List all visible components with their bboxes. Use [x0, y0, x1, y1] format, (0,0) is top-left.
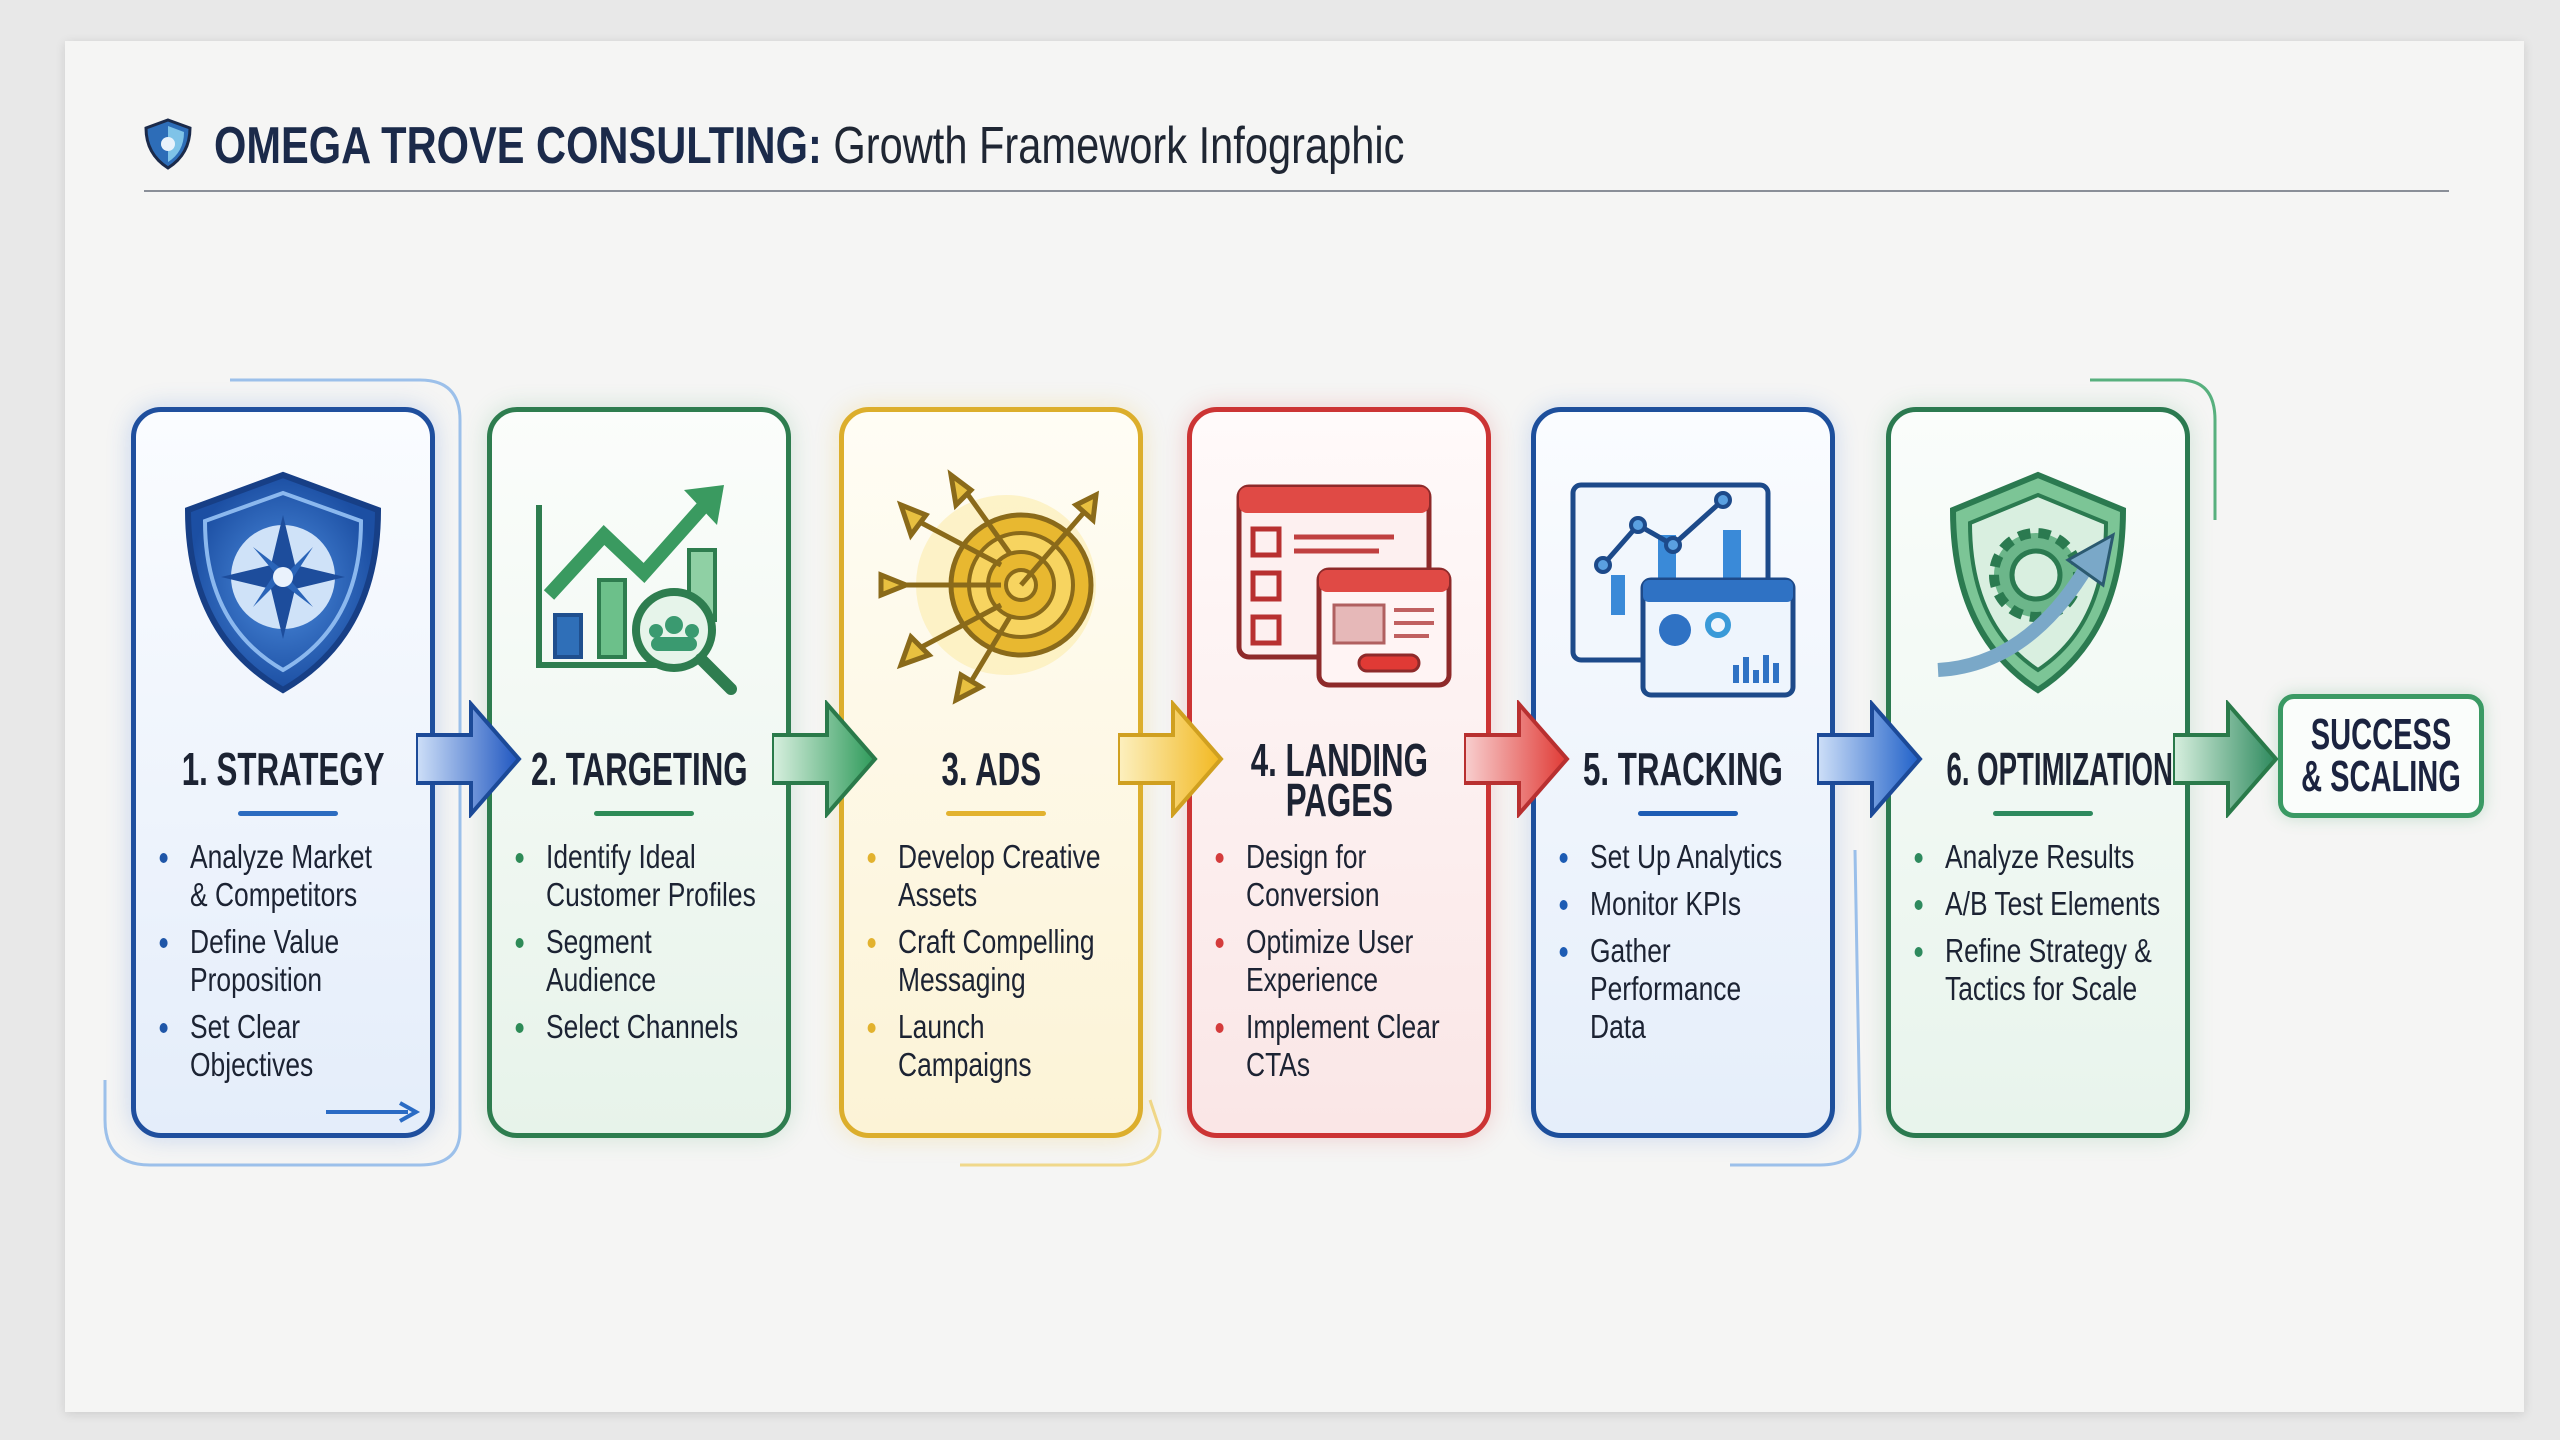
- icon: shield compass: [185, 472, 381, 694]
- card 4: landing pages: [1187, 407, 1491, 1138]
- bullet list: Set Clear: [190, 1008, 300, 1045]
- heading: 1. STRATEGY: [182, 743, 384, 795]
- card 4: landing pages: Implement Clear: [1246, 1008, 1440, 1045]
- success box: [2278, 694, 2484, 818]
- card 5: tracking: Monitor KPIs: [1590, 885, 1741, 922]
- card 3: ads: Craft Compelling: [898, 923, 1095, 960]
- card 6: optimization: 6. OPTIMIZATION: [1946, 743, 2173, 795]
- card 3: ads: Develop Creative: [898, 838, 1100, 875]
- card 2: targeting: [487, 407, 791, 1138]
- card 3: ads: 3. ADS: [941, 743, 1041, 795]
- bullet list: Proposition: [190, 961, 322, 998]
- icon: shield with gear: [1938, 472, 2126, 694]
- card 5: tracking: Data: [1590, 1008, 1646, 1045]
- icon: analytics dashboards: [1570, 482, 1796, 698]
- card 6: optimization: A/B Test Elements: [1945, 885, 2160, 922]
- icon: small arrow: [326, 1101, 420, 1123]
- icon: target with arrows: [878, 469, 1099, 705]
- card 3: ads: [839, 407, 1143, 1138]
- card 3: ads: Assets: [898, 876, 977, 913]
- card 2: targeting: Segment: [546, 923, 652, 960]
- card 5: tracking: Performance: [1590, 970, 1741, 1007]
- bullet list: & Competitors: [190, 876, 357, 913]
- card 3: ads: Launch: [898, 1008, 985, 1045]
- card 6: optimization: Refine Strategy &: [1945, 932, 2152, 969]
- card 3: ads: Messaging: [898, 961, 1026, 998]
- card 2: targeting: Select Channels: [546, 1008, 738, 1045]
- arrow 3: [1118, 700, 1224, 818]
- icon: browser windows: [1236, 484, 1452, 688]
- title text: OMEGA TROVE CONSULTING: Growth Framework Infographic: [214, 117, 1404, 175]
- card 5: tracking: [1531, 407, 1835, 1138]
- bullet list: Analyze Market: [190, 838, 372, 875]
- card 4: landing pages: Optimize User: [1246, 923, 1413, 960]
- card 2: targeting: Audience: [546, 961, 656, 998]
- card 4: landing pages: Design for: [1246, 838, 1366, 875]
- card 6: optimization: Analyze Results: [1945, 838, 2134, 875]
- bullet list: Objectives: [190, 1046, 313, 1083]
- bullet list: Define Value: [190, 923, 339, 960]
- card 2: targeting: 2. TARGETING: [531, 743, 747, 795]
- success box: SUCCESS: [2311, 710, 2451, 759]
- arrow 1: [416, 700, 522, 818]
- icon: title shield: [144, 118, 192, 170]
- arrow 6: [2173, 700, 2278, 818]
- success box: & SCALING: [2301, 752, 2461, 801]
- card 4: landing pages: PAGES: [1285, 774, 1393, 826]
- card 3: ads: Campaigns: [898, 1046, 1032, 1083]
- card 4: landing pages: 4. LANDING: [1250, 734, 1428, 786]
- arrow 2: [772, 700, 878, 818]
- card 5: tracking: Set Up Analytics: [1590, 838, 1782, 875]
- card 4: landing pages: CTAs: [1246, 1046, 1310, 1083]
- bullet list: [160, 838, 372, 1083]
- icon: chart with magnifier: [536, 485, 737, 695]
- card 5: tracking: Gather: [1590, 932, 1671, 969]
- card 5: tracking: 5. TRACKING: [1583, 743, 1783, 795]
- card 6: optimization: Tactics for Scale: [1945, 970, 2137, 1007]
- arrow 4: [1464, 700, 1570, 818]
- title: [144, 117, 1404, 175]
- card 4: landing pages: Experience: [1246, 961, 1378, 998]
- arrow 5: [1817, 700, 1923, 818]
- card 1: strategy: [131, 407, 435, 1138]
- card 2: targeting: Identify Ideal: [546, 838, 696, 875]
- card 6: optimization: [1886, 407, 2190, 1138]
- card 2: targeting: Customer Profiles: [546, 876, 756, 913]
- card 4: landing pages: Conversion: [1246, 876, 1380, 913]
